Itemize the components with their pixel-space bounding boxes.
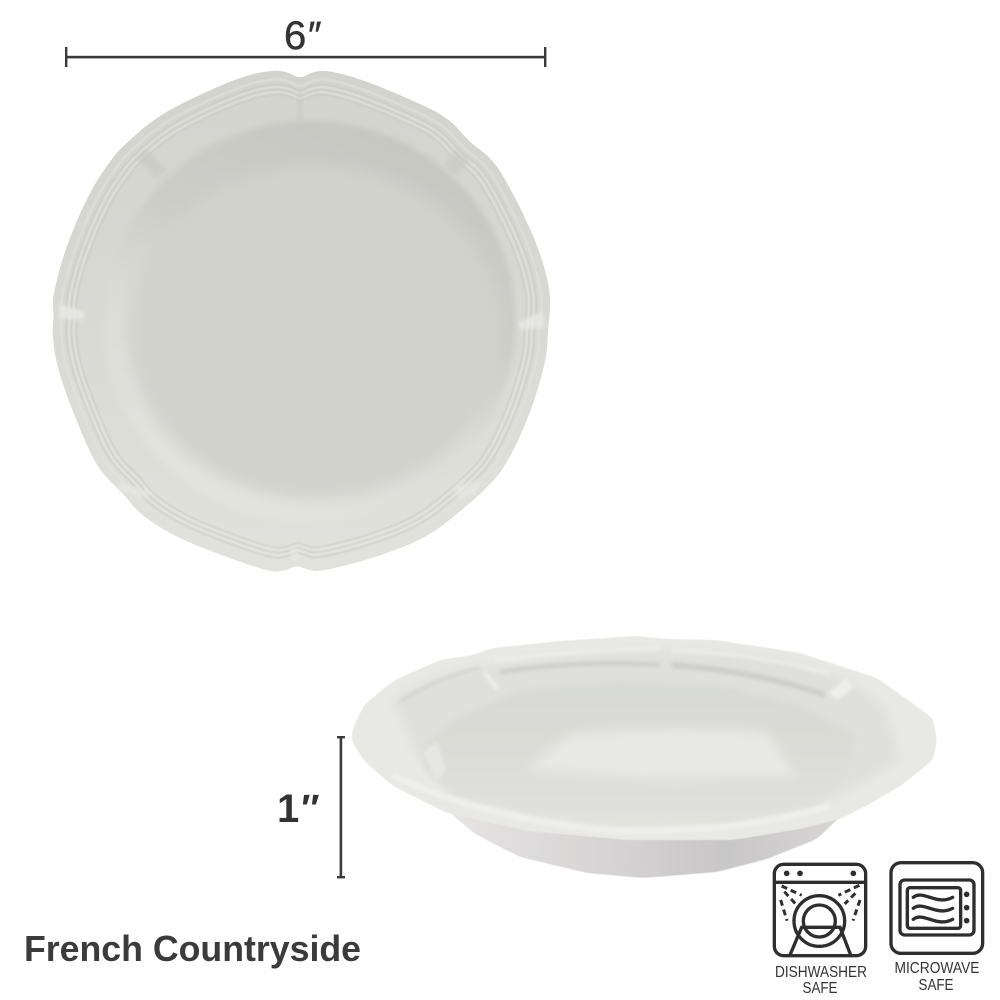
icon: dishwasher safe: [774, 864, 866, 956]
back rim ridges: [400, 648, 853, 702]
width label: ″: [306, 15, 321, 57]
label: microwave safe: SAFE: [918, 977, 954, 994]
plate well: [129, 166, 501, 498]
product name: French Countryside: [24, 929, 361, 969]
plate shoulder: [104, 121, 516, 523]
height label: 1: [277, 787, 299, 831]
height dimension line: 1 inch: [337, 736, 345, 878]
fluted rim lines: [61, 80, 541, 563]
notch creases: [58, 90, 544, 562]
side-view bowl: [352, 636, 937, 878]
back rim shading: [393, 651, 900, 800]
icon: microwave safe: [891, 863, 983, 953]
water jets: [781, 885, 860, 921]
bowl base: [447, 790, 845, 878]
bowl interior: [423, 682, 858, 827]
plate outline: [53, 71, 550, 572]
top-view plate: [53, 71, 550, 572]
label: microwave safe: [894, 960, 980, 994]
height label: ″: [299, 788, 319, 830]
left rim highlight: [423, 742, 446, 782]
front rim band: [393, 775, 830, 831]
width label: 6: [284, 14, 306, 58]
label: microwave safe: MICROWAVE: [894, 960, 980, 977]
bowl rim: [352, 636, 937, 840]
label: dishwasher safe: SAFE: [802, 980, 838, 997]
interior highlight: [525, 728, 797, 780]
label: dishwasher safe: DISHWASHER: [775, 964, 867, 981]
label: dishwasher safe: [775, 964, 867, 997]
width dimension line: 6 inches: [65, 47, 546, 67]
